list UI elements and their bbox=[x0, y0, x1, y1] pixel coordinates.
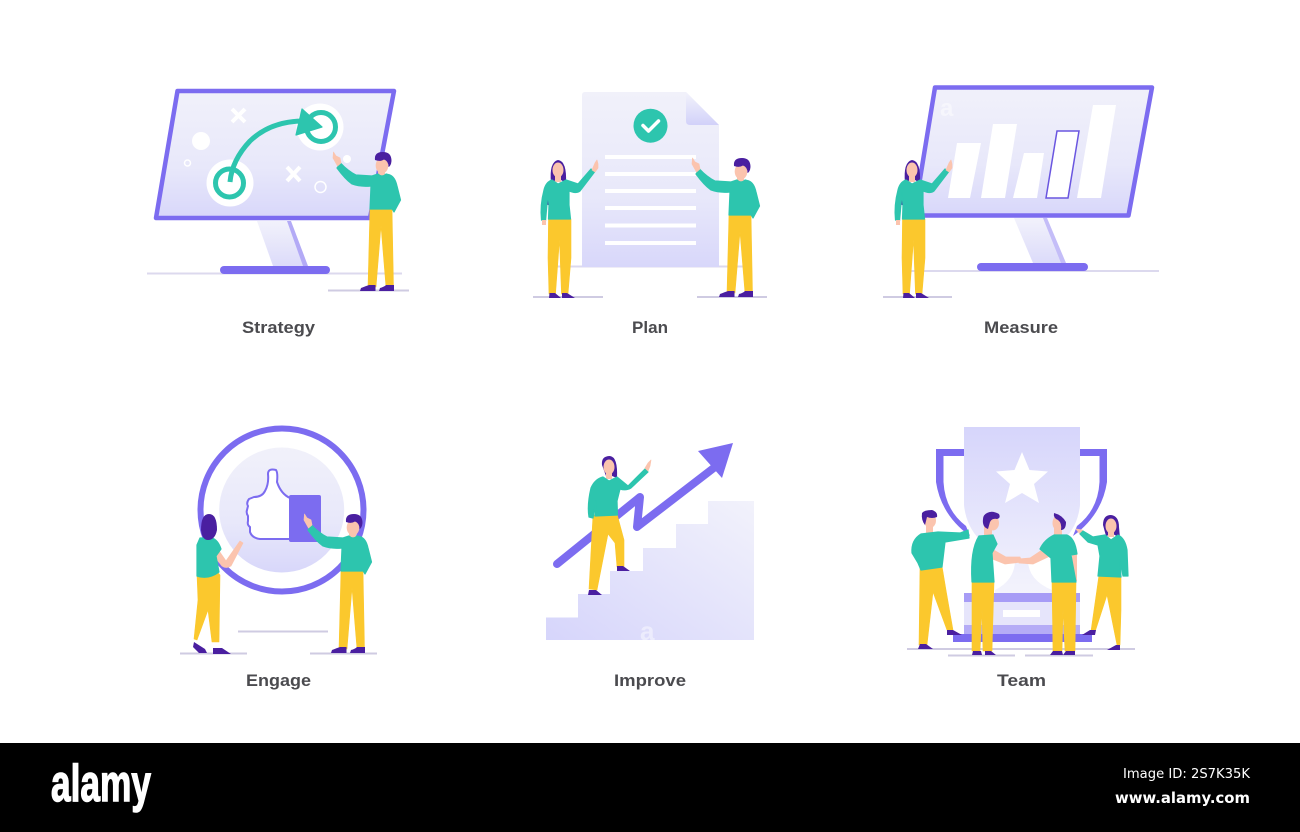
check badge bbox=[634, 109, 668, 143]
woman climbing bbox=[588, 456, 651, 595]
man pointing bbox=[692, 158, 760, 297]
shadows bbox=[533, 296, 767, 298]
man pointing bbox=[304, 514, 372, 653]
panel: plan bbox=[533, 92, 767, 337]
watermark: a bbox=[640, 616, 655, 646]
staircase bbox=[546, 501, 754, 640]
watermark: a bbox=[940, 95, 954, 122]
label: Improve: Improve bbox=[614, 671, 686, 690]
trophy cup bbox=[964, 427, 1080, 593]
image id: Image ID: 2S7K35K bbox=[1123, 766, 1251, 782]
star bbox=[996, 452, 1048, 503]
panel: measure bbox=[883, 88, 1159, 337]
monitor stand bbox=[257, 221, 307, 266]
monitor screen bbox=[914, 88, 1152, 216]
panel: strategy bbox=[147, 91, 409, 337]
growth arrow bbox=[557, 443, 733, 564]
woman pointing bbox=[895, 160, 952, 298]
monitor stand bbox=[1014, 218, 1065, 263]
man shaking hands, right bbox=[1018, 513, 1077, 655]
document fold bbox=[686, 92, 719, 125]
shadow bbox=[883, 296, 952, 298]
alamy logo: alamy bbox=[51, 755, 151, 813]
monitor base bbox=[220, 266, 330, 274]
thumbs up icon bbox=[247, 470, 321, 542]
website: www.alamy.com bbox=[1115, 789, 1250, 807]
footer bar bbox=[0, 743, 1300, 832]
label: Engage: Engage bbox=[246, 671, 311, 690]
man left bbox=[912, 510, 969, 649]
ring bbox=[200, 428, 364, 592]
panel: improve bbox=[546, 443, 754, 690]
label: Measure: Measure bbox=[984, 318, 1058, 337]
ground line bbox=[910, 270, 1159, 272]
woman right bbox=[1076, 515, 1128, 650]
woman pointing bbox=[541, 160, 598, 298]
ground line bbox=[555, 266, 743, 268]
monitor base bbox=[977, 263, 1088, 271]
man shadow bbox=[328, 290, 409, 292]
man pointing bbox=[333, 152, 400, 291]
ground line bbox=[147, 272, 402, 274]
woman from behind bbox=[193, 514, 243, 654]
panel: engage bbox=[180, 428, 377, 690]
shadow lines bbox=[180, 630, 377, 654]
shadow lines bbox=[907, 648, 1135, 656]
monitor screen bbox=[156, 91, 394, 218]
inner circle bbox=[219, 448, 344, 572]
man shaking hands, left bbox=[972, 512, 1022, 655]
document bbox=[582, 92, 719, 267]
label: Strategy: Strategy bbox=[242, 318, 316, 337]
label: Team: Team bbox=[997, 671, 1046, 690]
trophy base bbox=[953, 593, 1092, 642]
trophy handles bbox=[936, 449, 1107, 536]
tactics board marks bbox=[184, 104, 351, 206]
panel: team bbox=[907, 427, 1135, 690]
label: Plan: Plan bbox=[632, 318, 668, 337]
document lines bbox=[605, 155, 696, 245]
bar chart bbox=[948, 105, 1116, 198]
teal arrow bbox=[216, 109, 336, 197]
